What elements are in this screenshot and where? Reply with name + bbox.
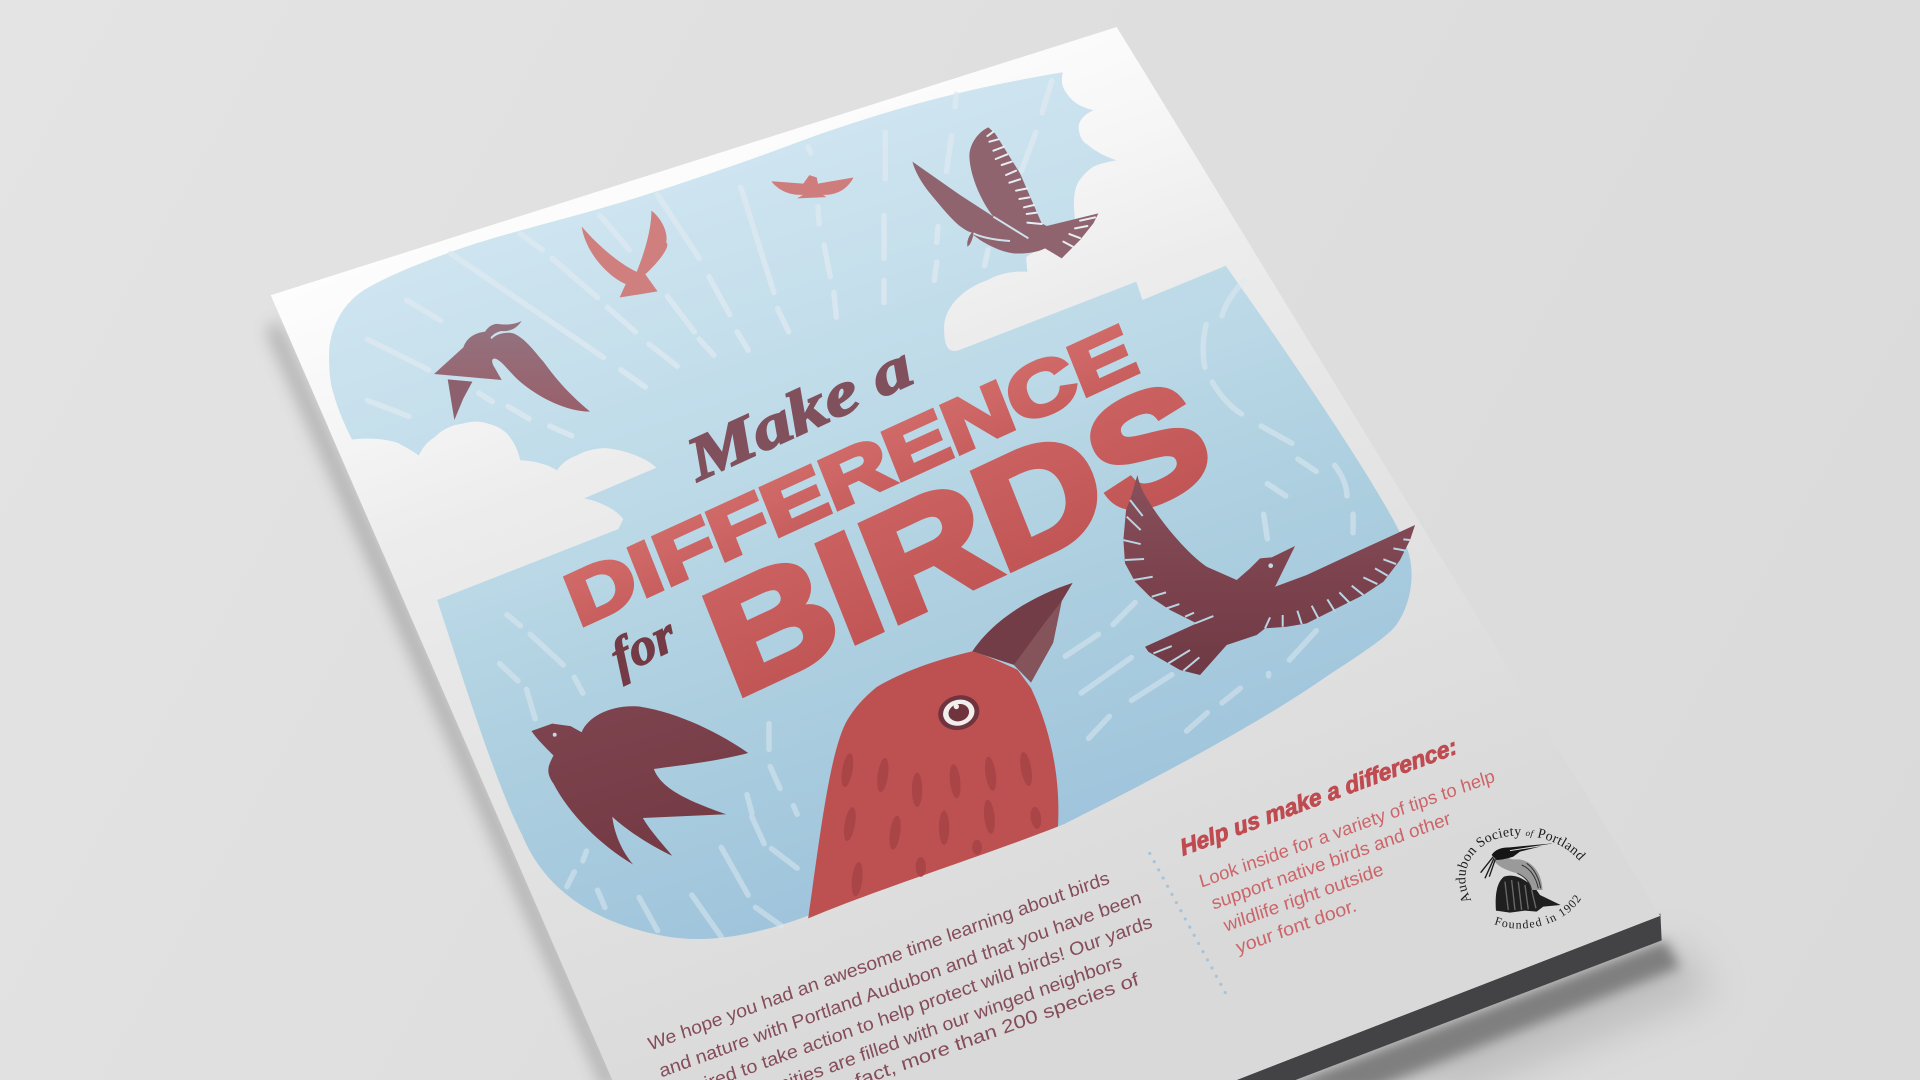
bird: pink V	[582, 211, 667, 298]
callout: help us make a difference	[1177, 733, 1497, 958]
booklet page edge thickness	[1237, 913, 1662, 1080]
right clouds	[944, 61, 1226, 351]
beak	[972, 583, 1072, 672]
bird: main red	[808, 583, 1073, 918]
logo: Audubon Society of Portland: Founded in 1902	[1494, 895, 1581, 928]
dotted divider	[1150, 853, 1228, 998]
eye	[938, 695, 980, 730]
body	[808, 651, 1058, 918]
paper	[271, 27, 1660, 1080]
logo: Audubon Society of Portland: Audubon Society of Portland	[1456, 828, 1586, 901]
callout body	[1197, 765, 1497, 958]
sky shape	[329, 61, 1412, 939]
bird: right large	[1123, 475, 1415, 675]
title: BIRDS: BIRDS	[685, 347, 1230, 728]
icon: heron	[1481, 843, 1561, 913]
title: Make a: Make a	[676, 332, 922, 495]
bird: left swallow	[531, 706, 748, 864]
sky speed dashes	[367, 81, 1353, 937]
title: DIFFERENCE: DIFFERENCE	[554, 309, 1147, 642]
callout body: support native birds and other	[1209, 807, 1453, 914]
left cloud	[306, 416, 656, 600]
bird: top left	[434, 321, 590, 420]
bird: small pink eagle	[771, 175, 853, 198]
intro paragraph: We hope you had an awesome time learning about birds	[645, 867, 1112, 1054]
callout body: wildlife right outside	[1220, 858, 1386, 936]
intro paragraph: and nature with Portland Audubon and that you have been	[656, 886, 1143, 1080]
callout heading: Help us make a difference:	[1177, 733, 1460, 861]
title: for: for	[602, 605, 685, 687]
callout body: Look inside for a variety of tips to help	[1197, 765, 1497, 892]
booklet shadow	[268, 321, 1714, 1080]
booklet cover	[271, 27, 1660, 1080]
callout body: your font door.	[1233, 894, 1359, 958]
feathers	[839, 751, 1043, 897]
bird: top right	[912, 127, 1098, 258]
